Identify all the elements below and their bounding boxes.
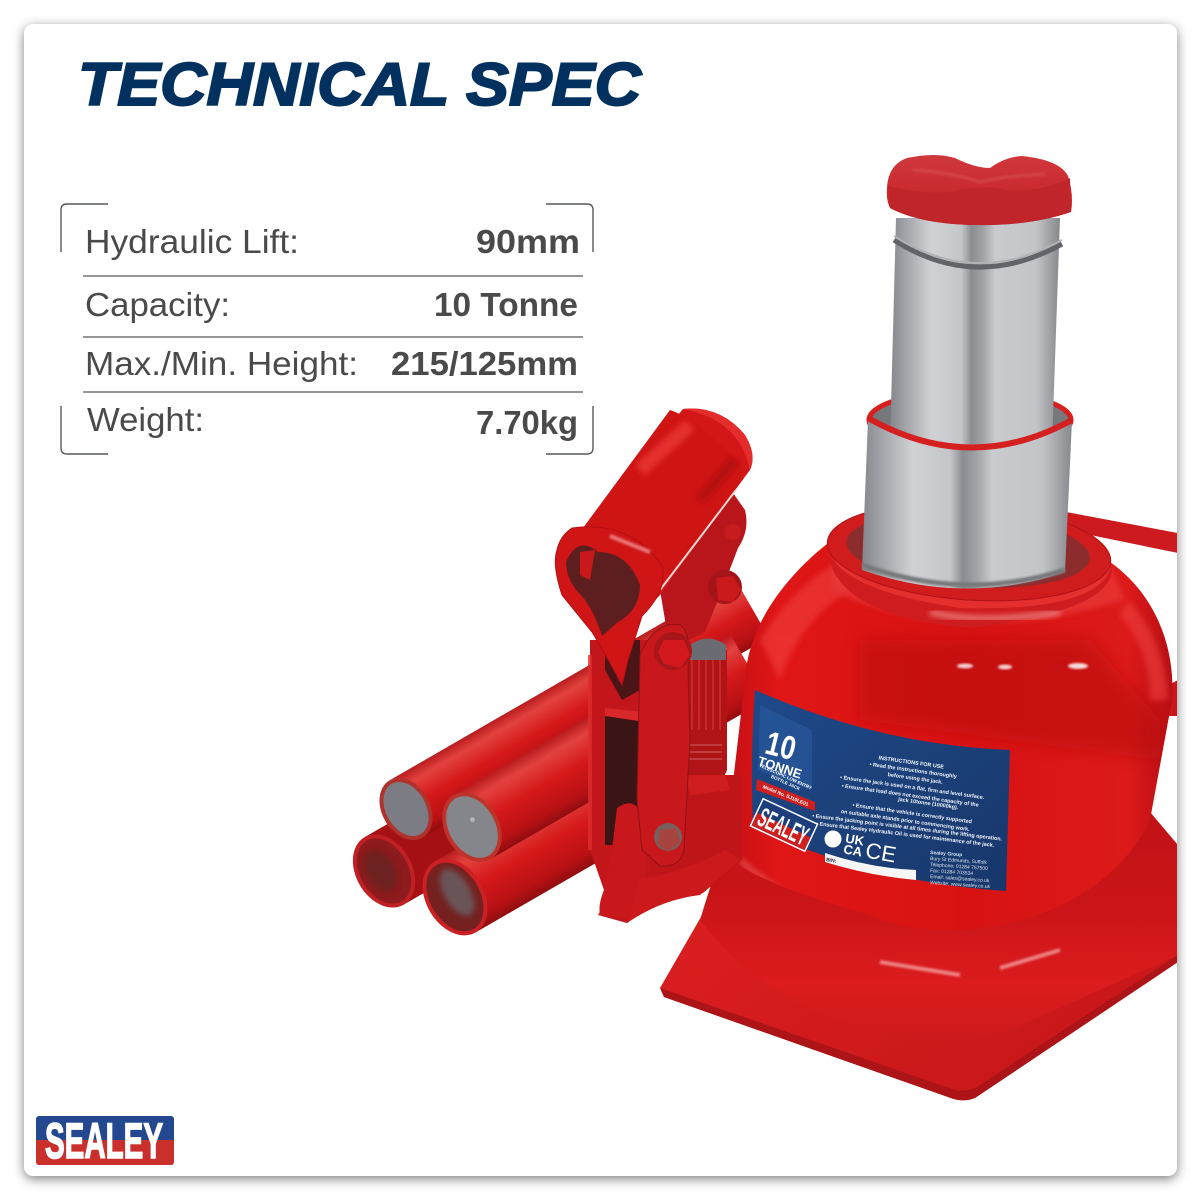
- label batch number box: [825, 853, 916, 880]
- label address: Sealey Group: [930, 850, 962, 858]
- row: capacity: [85, 286, 578, 323]
- label instructions: • Read the instructions thoroughly: [869, 762, 957, 780]
- stowed handle tube: upper left: [379, 590, 760, 840]
- label read-manual icon: [824, 830, 842, 848]
- row: max/min height: 215/125mm: [391, 345, 578, 382]
- jack body: [725, 494, 1172, 930]
- stowed handle tube: upper right: [442, 636, 747, 862]
- label instructions: on suitable axle stands prior to commencing work.: [840, 809, 970, 833]
- collar rim: [826, 512, 1112, 602]
- label instructions: INSTRUCTIONS FOR USE: [878, 755, 945, 771]
- row: hydraulic lift: [85, 223, 580, 260]
- label UKCA mark: CA: [842, 841, 864, 860]
- label capacity: TONNE: [756, 753, 804, 782]
- pump: rear foot mass: [598, 775, 742, 923]
- label CE mark: CE: [864, 838, 898, 867]
- label capacity: 10: [762, 724, 800, 767]
- label instructions: jack 10tonne (10000kg).: [897, 797, 959, 811]
- logo: Sealey: SEALEY: [45, 1113, 163, 1169]
- tube slot: [497, 824, 524, 843]
- instruction label: [750, 690, 1010, 891]
- row: hydraulic lift: Hydraulic Lift:: [85, 223, 299, 260]
- label address: Bury St Edmunds, Suffolk: [930, 856, 988, 866]
- label instructions: [812, 755, 1003, 849]
- flange: [700, 813, 1177, 1015]
- label capacity: TELESCOPIC LOW ENTRY: [759, 763, 813, 790]
- row: weight: Weight:: [87, 401, 204, 438]
- pump: socket mount: [660, 493, 746, 650]
- product: bottle jack: [340, 155, 1178, 1100]
- stowed handle tube: lower left: [352, 824, 456, 908]
- row: hydraulic lift: 90mm: [476, 223, 580, 260]
- pump: link plate: [637, 624, 692, 866]
- pump: handle socket: [555, 409, 753, 685]
- row: weight: [87, 401, 578, 441]
- logo: Sealey: [36, 1113, 174, 1169]
- rear handle rod: [1066, 512, 1178, 553]
- row: max/min height: Max./Min. Height:: [85, 345, 358, 382]
- ram cap: [887, 155, 1072, 225]
- ram: upper stage: [890, 218, 1062, 445]
- label model number: Model No. SJ10LE01: [762, 784, 809, 808]
- pump: bracket and foot: [590, 640, 740, 923]
- label instructions: • Ensure that load does not exceed the capacity of the: [841, 783, 979, 809]
- label address: [930, 850, 991, 890]
- label instructions: • Ensure that the vehicle is correctly supported: [852, 803, 972, 825]
- collar weld highlight: [930, 612, 1060, 618]
- collar front lip: [828, 548, 1112, 628]
- label instructions: • Ensure the jack is used on a flat, firm and level surface.: [840, 775, 985, 801]
- ram: lower stage: [862, 418, 1072, 589]
- label capacity: BOTTLE JACK: [770, 774, 802, 792]
- title: TECHNICAL SPEC: [78, 51, 643, 118]
- spec table: [61, 204, 593, 454]
- row: capacity: Capacity:: [85, 286, 230, 323]
- label instructions: • Ensure that Sealey Hydraulic Oil is used for maintenance of the jack.: [816, 821, 995, 849]
- body reflections: [740, 545, 1168, 925]
- row dividers: [83, 276, 583, 392]
- label instructions: before using the jack.: [887, 772, 943, 786]
- label address: Website: www.sealey.co.uk: [930, 880, 991, 890]
- label left stripes: [758, 705, 812, 790]
- label address: Email: sales@sealey.co.uk: [930, 874, 990, 884]
- label capacity: [759, 732, 812, 790]
- row: capacity: 10 Tonne: [434, 286, 578, 323]
- rear socket stub: [1169, 680, 1177, 716]
- label address: Telephone: 01284 757500: [930, 862, 988, 872]
- label UKCA mark: UK: [844, 831, 865, 849]
- label instructions: • Ensure the jacking point is visible at all times during the lifting operation.: [812, 813, 1003, 843]
- base plate: [660, 916, 1177, 1100]
- table corner brackets: [61, 204, 593, 454]
- label logo: [750, 799, 818, 853]
- pump: knurled cylinder: [685, 638, 730, 795]
- ram: lower stage back ring: [866, 399, 1074, 426]
- label address: Fax: 01284 703534: [930, 868, 973, 877]
- label logo: SEALEY: [753, 802, 813, 851]
- row: weight: 7.70kg: [476, 404, 578, 441]
- label red band: [756, 779, 815, 811]
- stowed handle tube: lower right: [422, 802, 595, 936]
- row: max/min height: [85, 345, 578, 382]
- label B/N text: B/N:: [826, 857, 837, 865]
